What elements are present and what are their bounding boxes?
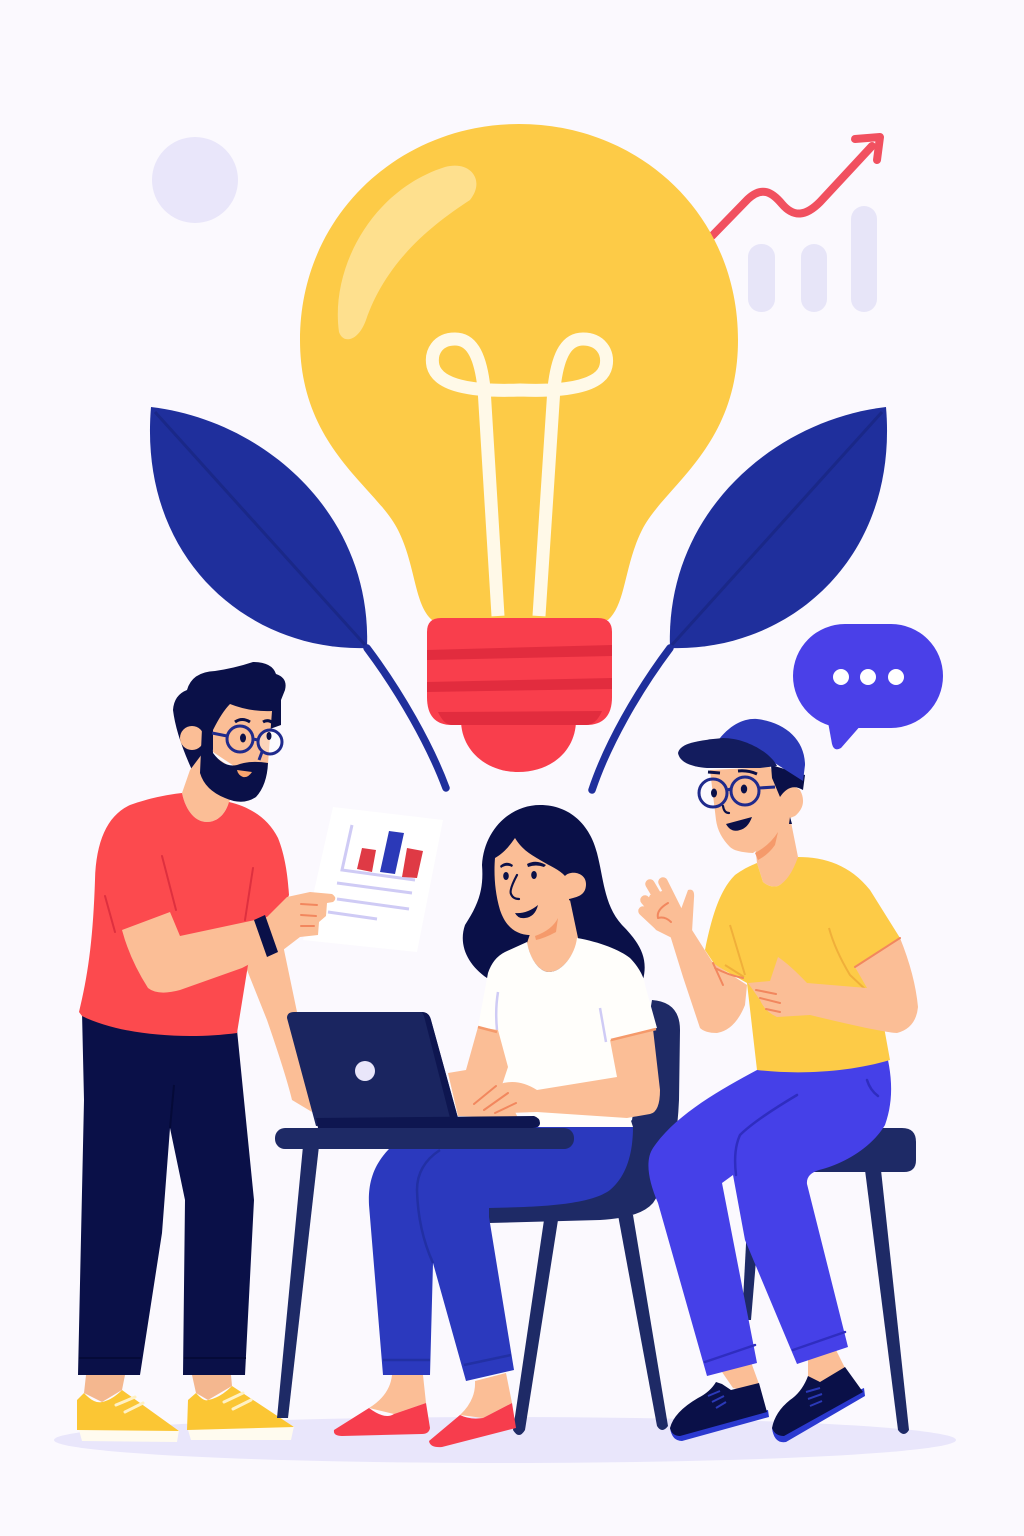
table [275,1128,574,1418]
woman [334,805,660,1447]
face [213,704,272,768]
man on the right [642,719,918,1442]
red t-shirt [79,793,289,1036]
hair [771,765,805,824]
blue trousers [648,1060,891,1376]
neck [182,750,250,822]
back arm [245,945,312,1112]
ankles [84,1375,232,1402]
face details [699,771,775,831]
glass highlight [338,166,476,339]
head [710,767,803,853]
hair back [173,662,286,770]
paper with chart [303,807,443,952]
yellow t-shirt [705,857,900,1072]
bulb glass [300,124,738,620]
stool [742,1128,916,1434]
yellow sneakers [77,1386,294,1442]
laptop [287,1012,540,1128]
wristband [254,915,278,957]
ear [180,726,204,750]
red flats [334,1403,516,1447]
front arm and hand [122,892,335,993]
ankles [369,1373,512,1418]
face details [500,862,546,918]
white top [478,938,657,1127]
bulb screw base [427,618,612,772]
arm and hand on chest [748,938,918,1033]
dark shoes with blue soles [670,1367,865,1442]
dark trousers [78,1012,254,1375]
man on the left [77,662,443,1442]
decorative circle [152,137,238,223]
right leaf [592,407,887,790]
neck [755,817,798,886]
hair [463,805,645,980]
trousers [369,1127,633,1381]
arms and hands [448,1027,518,1118]
ground shadow [54,1417,956,1463]
beard [200,728,268,802]
speech bubble [793,624,943,749]
light bulb [300,124,738,772]
glasses and eyes [212,720,282,760]
left leaf [150,407,446,788]
waving arm and hand [642,882,747,1033]
filament [432,339,607,616]
head [495,838,586,935]
growth chart [712,137,880,312]
chair [489,1000,680,1435]
cap [678,719,805,781]
neck [527,900,578,972]
red trend arrow [712,137,880,236]
ankles [722,1350,845,1389]
